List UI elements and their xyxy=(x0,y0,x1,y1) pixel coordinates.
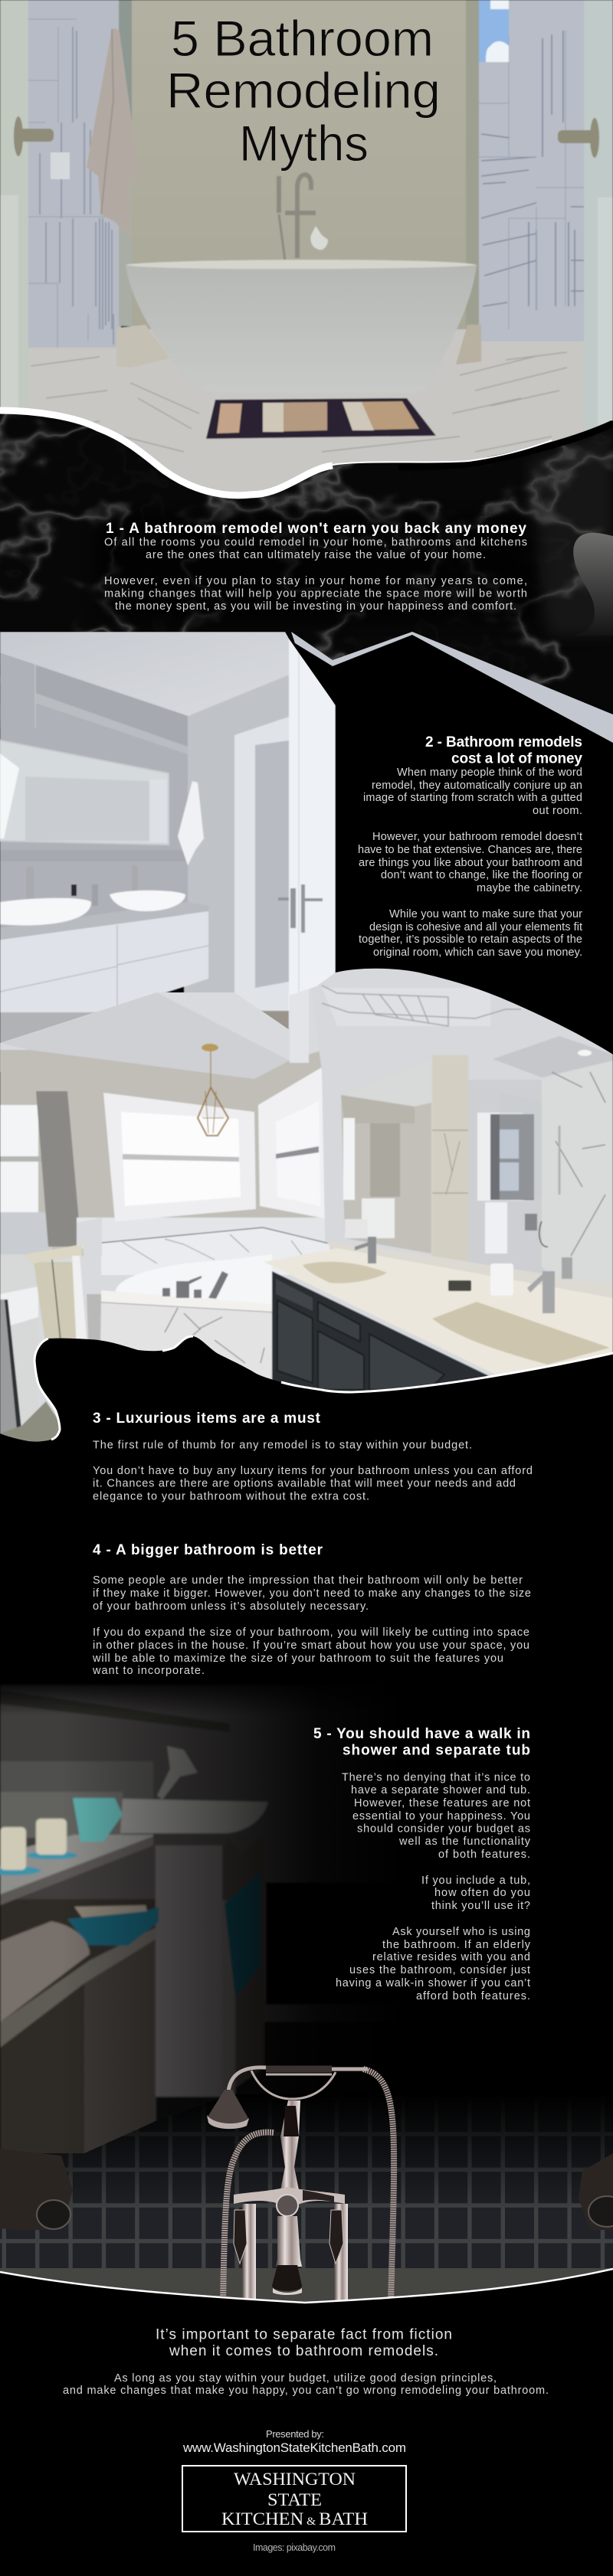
panel: marble background xyxy=(0,398,613,727)
marble wainscot behind tub xyxy=(101,1228,329,1275)
dark floor xyxy=(153,2022,398,2159)
logo: Washington State Kitchen & Bath: KITCHEN & BATH xyxy=(221,2509,368,2529)
door handle xyxy=(278,884,323,933)
text: presented by: Presented by: xyxy=(266,2428,324,2440)
shower door frame xyxy=(0,1299,21,1433)
sinks xyxy=(0,898,91,925)
levers xyxy=(234,2210,247,2264)
text: myth 2: image of starting from scratch with a gutted xyxy=(363,792,582,804)
text: myth 5: how often do you xyxy=(434,1887,530,1899)
panel: hero bathroom photo xyxy=(0,0,613,492)
text: myth 5: the bathroom. If an elderly xyxy=(382,1939,531,1951)
sponge xyxy=(310,226,328,250)
crossbar xyxy=(234,2187,345,2208)
door strip xyxy=(290,980,309,1063)
text: myth 5: relative resides with you and xyxy=(372,1951,530,1963)
door xyxy=(289,638,336,1072)
pendant light xyxy=(198,1045,228,1136)
text: myth 1: 1 - A bathroom remodel won't earn you back any money xyxy=(106,521,526,537)
ceiling xyxy=(0,632,291,716)
text: myth 5: afford both features. xyxy=(416,1990,530,2002)
side wall xyxy=(184,670,291,1015)
left mirror xyxy=(341,1058,431,1254)
text: myth 5: Ask yourself who is using xyxy=(392,1926,530,1938)
doors xyxy=(0,0,28,551)
left window xyxy=(0,1105,38,1214)
lower cabinet area xyxy=(0,1899,156,2159)
text: myth 4: if they make it bigger. However, you don’t need to make any changes to the size xyxy=(93,1587,531,1600)
pedestal xyxy=(156,1838,264,2097)
text: myth 1: the money spent, as you will be investing in your happiness and comfort. xyxy=(115,600,516,613)
cradle xyxy=(228,2068,368,2099)
door frame xyxy=(234,717,289,1011)
main wall xyxy=(132,0,466,329)
towels xyxy=(74,1905,149,1921)
left marble and tub reflection xyxy=(0,1254,38,1438)
vanity counter xyxy=(264,1248,613,1377)
text: myth 1: making changes that will help you appreciate the space more will be worth xyxy=(104,588,527,600)
tile wall xyxy=(0,653,188,930)
side fixtures xyxy=(0,2149,73,2230)
text: myth 5: uses the bathroom, consider just xyxy=(349,1964,530,1976)
dark cabinets xyxy=(272,1271,494,1398)
tub front marble xyxy=(100,1303,274,1386)
text: image credit: Images: pixabay.com xyxy=(253,2542,336,2553)
text: myth 2: However, your bathroom remodel doesn’t xyxy=(372,831,582,843)
stem xyxy=(279,2100,300,2198)
text: conclusion: when it comes to bathroom remodels. xyxy=(169,2343,438,2359)
centre window xyxy=(103,1093,256,1221)
text backdrop: darker patch xyxy=(96,515,540,622)
text: myth 2: don’t want to change, like the flooring or xyxy=(381,869,582,881)
text: myth 3: it. Chances are there are options available that will meet your needs and add xyxy=(93,1478,516,1490)
text: myth 5: think you’ll use it? xyxy=(431,1900,530,1912)
text: myth 2: 2 - Bathroom remodels xyxy=(425,734,582,750)
shower head xyxy=(207,2090,249,2126)
towel rack xyxy=(322,986,521,1026)
heading: main title: Remodeling xyxy=(166,62,441,119)
tub rim xyxy=(101,1290,272,1312)
logo: Washington State Kitchen & Bath xyxy=(182,2466,406,2532)
text: myth 5: 5 - You should have a walk in xyxy=(313,1726,530,1742)
bath mat xyxy=(206,398,436,439)
text: myth 2: together, it’s possible to retain aspects of the xyxy=(359,933,582,946)
text: myth 4: want to incorporate. xyxy=(92,1665,205,1677)
text: myth 5: having a walk-in shower if you can’t xyxy=(336,1977,530,1989)
upper panel xyxy=(309,965,613,1271)
dark window panel xyxy=(266,1882,398,2005)
counter xyxy=(0,903,187,940)
soffit and ceiling light xyxy=(493,1036,613,1077)
dark column xyxy=(36,1091,81,1247)
tub faucet xyxy=(162,1271,228,1299)
tub xyxy=(115,1254,272,1306)
light switch xyxy=(51,152,70,179)
door handles xyxy=(14,116,599,158)
text: myth 4 xyxy=(92,1542,531,1677)
lower shelf xyxy=(0,1926,159,2048)
baseboards xyxy=(116,325,170,368)
backsplash xyxy=(326,1241,613,1317)
legs xyxy=(242,2204,256,2305)
text: myth 5: If you include a tub, xyxy=(421,1875,530,1887)
heading: main title xyxy=(166,10,441,172)
tub ledge xyxy=(0,2268,613,2306)
logo: Washington State Kitchen & Bath: WASHINGTON xyxy=(234,2470,356,2489)
vanity faucets xyxy=(355,1237,376,1263)
divider: bottom curve xyxy=(0,2269,613,2303)
beige wall xyxy=(0,1049,326,1256)
floor xyxy=(28,329,585,492)
text: myth 4: Some people are under the impression that their bathroom will only be better xyxy=(93,1574,523,1587)
text: myth 5: shower and separate tub xyxy=(343,1743,530,1758)
shape: light angular band xyxy=(291,632,613,747)
right marble tiles xyxy=(479,0,586,342)
text: myth 4: in other places in the house. If you’re smart about how you use your space, you xyxy=(93,1639,529,1652)
shape: grey blob xyxy=(571,533,613,636)
divider: vanity photo curve xyxy=(34,1336,613,1440)
lower left floor xyxy=(0,1401,61,1443)
text: website: www.WashingtonStateKitchenBath.com xyxy=(182,2440,406,2455)
text: myth 3: 3 - Luxurious items are a must xyxy=(93,1411,321,1427)
text: conclusion: As long as you stay within your budget, utilize good design principles, xyxy=(114,2372,497,2385)
wall xyxy=(0,1685,398,2159)
text: myth 2: original room, which can save you money. xyxy=(373,946,582,959)
text: myth 2: have to be that extensive. Chances are, there xyxy=(358,844,582,856)
sink xyxy=(120,1799,268,1833)
text: myth 5: have a separate shower and tub. xyxy=(351,1784,530,1796)
towel xyxy=(86,28,132,236)
text: myth 2: While you want to make sure that your xyxy=(389,908,582,920)
logo: Washington State Kitchen & Bath: STATE xyxy=(267,2490,322,2510)
panel: black background for myth 2 xyxy=(295,635,613,1072)
hand shower and faucet xyxy=(207,2068,394,2305)
text: myth 2: cost a lot of money xyxy=(451,750,582,767)
hoses xyxy=(223,2069,394,2305)
text: myth 2: remodel, they automatically conjure up an xyxy=(372,780,582,792)
text: myth 2 xyxy=(358,734,582,959)
towel xyxy=(178,781,204,865)
glasses xyxy=(73,1798,123,1842)
text: myth 1: Of all the rooms you could remodel in your home, bathrooms and kitchens xyxy=(104,536,527,548)
spout xyxy=(276,2216,302,2267)
panel: dark bathroom photo xyxy=(0,1677,613,2313)
tile wall xyxy=(0,2094,613,2272)
text: myth 3: The first rule of thumb for any remodel is to stay within your budget. xyxy=(93,1440,472,1452)
text: myth 4: of your bathroom unless it’s absolutely necessary. xyxy=(93,1600,369,1613)
heading: main title: 5 Bathroom xyxy=(171,10,434,67)
text: myth 2: design is cohesive and all your elements fit xyxy=(369,921,582,933)
text: myth 4: If you do expand the size of your bathroom, you will likely be cutting into space xyxy=(93,1626,529,1639)
text: myth 3 xyxy=(93,1411,533,1502)
text: myth 5: However, these features are not xyxy=(354,1797,530,1809)
text: myth 4: will be able to maximize the size of your bathroom to suit the features you xyxy=(92,1652,503,1665)
text: myth 1 xyxy=(104,521,527,613)
text: myth 5: should consider your budget as xyxy=(357,1822,530,1835)
left marble tiles xyxy=(28,0,121,348)
shelf xyxy=(0,1835,153,1894)
right mirror / shower xyxy=(468,1080,545,1275)
marble strip xyxy=(432,1055,468,1273)
text: myth 2: out room. xyxy=(533,805,582,817)
text: myth 2: maybe the cabinetry. xyxy=(477,882,582,894)
text: conclusion: and make changes that make you happy, you can’t go wrong remodeling your bathroom. xyxy=(63,2385,549,2397)
text: myth 2: When many people think of the word xyxy=(397,767,582,779)
heading: main title: Myths xyxy=(239,115,369,172)
panel: marble vanity bathroom photo xyxy=(0,965,613,1447)
divider: hero bottom curve xyxy=(0,410,613,495)
text: myth 5: essential to your happiness. You xyxy=(352,1810,530,1822)
text: conclusion xyxy=(63,2326,549,2397)
sinks xyxy=(303,1262,387,1283)
white pillar xyxy=(77,1218,102,1355)
horizontal fade overlay xyxy=(0,1677,613,2167)
lower white wall xyxy=(77,1218,329,1248)
text: myth 1: are the ones that can ultimately raise the value of your home. xyxy=(146,549,486,561)
upper ledge xyxy=(0,1690,230,1732)
text: myth 4: 4 - A bigger bathroom is better xyxy=(93,1542,323,1558)
ceiling xyxy=(0,992,290,1079)
soap and cup xyxy=(490,1263,513,1296)
candles xyxy=(0,1819,77,1875)
faucet xyxy=(279,175,316,260)
text: myth 5: of both features. xyxy=(438,1849,530,1861)
panel: white bathroom photo xyxy=(0,632,336,1072)
text: myth 2: are things you like about your bathroom and xyxy=(359,857,582,869)
sink faucet xyxy=(157,1746,198,1800)
text: myth 5 xyxy=(313,1726,531,2002)
text: myth 5: well as the functionality xyxy=(398,1836,531,1848)
post xyxy=(34,1262,77,1348)
text: myth 5: There’s no denying that it’s nice to xyxy=(342,1772,530,1784)
text: myth 3: elegance to your bathroom without the extra cost. xyxy=(93,1490,369,1502)
text: conclusion: It’s important to separate fact from fiction xyxy=(156,2326,452,2343)
tub xyxy=(126,265,477,335)
floor xyxy=(0,1012,97,1072)
faucets and bottles xyxy=(26,865,138,899)
text: myth 3: You don’t have to buy any luxury items for your bathroom unless you can afford xyxy=(93,1465,533,1477)
cabinets xyxy=(0,911,208,1012)
mirror xyxy=(0,740,169,845)
window xyxy=(479,0,509,62)
text: myth 1: However, even if you plan to stay in your home for many years to come, xyxy=(104,575,527,587)
right window xyxy=(258,1066,328,1219)
